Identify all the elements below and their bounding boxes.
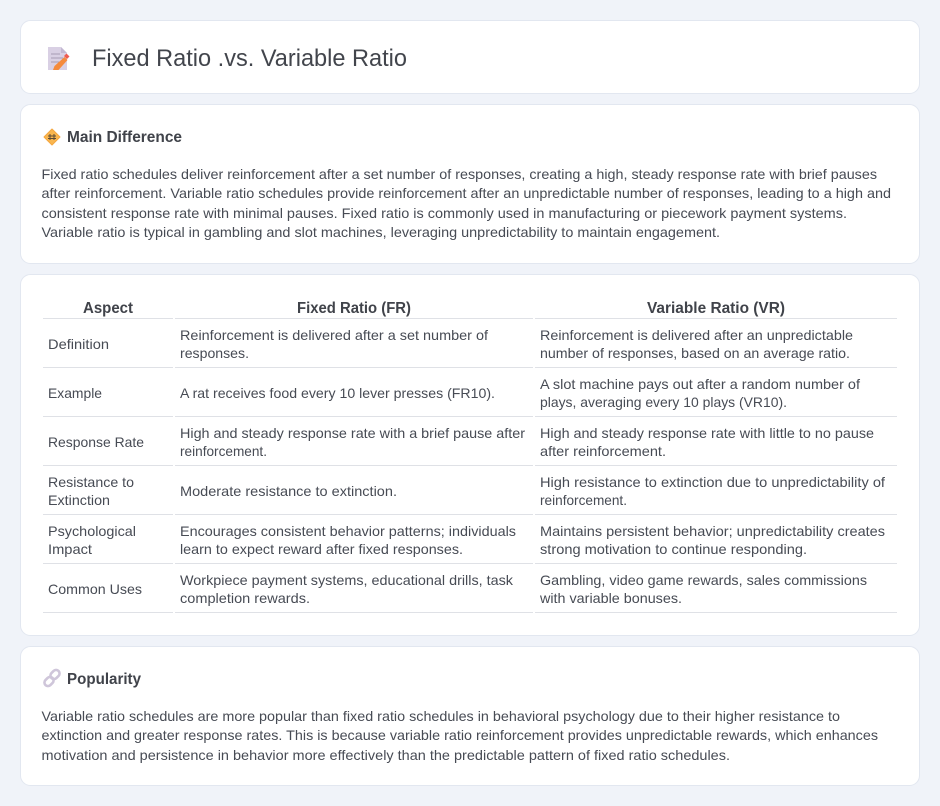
text block: main difference: Fixed ratio schedules deliver reinforcement after a set number of responses, creating a high, steady response rate with brief pauses: [42, 166, 877, 182]
text block: main difference: consistent response rate with minimal pauses. Fixed ratio is commonly used in manufacturing or piecework payment systems.: [42, 205, 847, 221]
table row: definition: Reinforcement is delivered after an unpredictable: [540, 327, 853, 343]
panel: comparison table: [20, 274, 920, 636]
table row: common uses: Gambling, video game rewards, sales commissions: [540, 572, 867, 588]
table row: psychological impact: Encourages consistent behavior patterns; individuals: [180, 523, 516, 539]
table row: response rate: High and steady response rate with a brief pause after: [180, 425, 525, 441]
text block: main difference: [42, 166, 891, 240]
table row: definition: [48, 327, 853, 361]
text block: popularity: extinction and greater response rates. This is because variable ratio reinforcement provides unpredictable rewards, which enhances: [42, 727, 878, 743]
icon: document with pencil: [48, 47, 70, 70]
table row: definition: responses.: [180, 345, 249, 361]
table row: example: A rat receives food every 10 lever presses (FR10).: [180, 385, 495, 401]
table row: definition: Reinforcement is delivered after a set number of: [180, 327, 488, 343]
table row: common uses: completion rewards.: [180, 590, 310, 606]
table row: response rate: after reinforcement.: [540, 443, 666, 459]
table row: resistance to extinction: Extinction: [48, 492, 110, 508]
table row: resistance to extinction: Moderate resistance to extinction.: [180, 483, 397, 499]
table row: common uses: Workpiece payment systems, educational drills, task: [180, 572, 514, 588]
table row: example: A slot machine pays out after a random number of: [540, 376, 860, 392]
table row: definition: number of responses, based on an average ratio.: [540, 345, 850, 361]
table row: definition: Definition: [48, 336, 109, 352]
table row: psychological impact: learn to expect reward after fixed responses.: [180, 541, 463, 557]
table row: psychological impact: [48, 523, 885, 557]
heading: popularity: Popularity: [67, 671, 141, 688]
table row: resistance to extinction: [48, 474, 885, 508]
table row: resistance to extinction: Resistance to: [48, 474, 134, 490]
table header row: Fixed Ratio (FR): [297, 300, 411, 317]
table row: common uses: Common Uses: [48, 581, 142, 597]
table row: psychological impact: Maintains persistent behavior; unpredictability creates: [540, 523, 885, 539]
text block: popularity: Variable ratio schedules are more popular than fixed ratio schedules in behavioral psychology due to their higher resistance to: [42, 708, 840, 724]
table header row: Variable Ratio (VR): [647, 300, 785, 317]
icon: diamond sign: [44, 129, 60, 145]
text block: popularity: [42, 708, 878, 763]
table row: example: Example: [48, 385, 102, 401]
panel: title header: [20, 20, 920, 94]
table row: psychological impact: strong motivation to continue responding.: [540, 541, 807, 557]
table row: common uses: [48, 572, 867, 606]
table row: response rate: reinforcement.: [180, 443, 267, 459]
table row: response rate: Response Rate: [48, 434, 144, 450]
text block: popularity: motivation and persistence in behavior more effectively than the predictable pattern of fixed ratio schedules.: [42, 747, 730, 763]
table row: common uses: with variable bonuses.: [539, 590, 682, 606]
table row: example: [48, 376, 860, 410]
text block: main difference: Variable ratio is typical in gambling and slot machines, leveraging unpredictability to maintain engagement.: [42, 224, 720, 240]
table row: response rate: High and steady response rate with little to no pause: [540, 425, 874, 441]
table row: psychological impact: Psychological: [48, 523, 136, 539]
panel: popularity: [20, 646, 920, 786]
table header row: [83, 300, 785, 317]
table row: resistance to extinction: reinforcement.: [540, 492, 627, 508]
heading: main difference: Main Difference: [67, 129, 182, 146]
table header row: Aspect: [83, 300, 134, 317]
panel: main difference: [20, 104, 920, 264]
table row: example: plays, averaging every 10 plays (VR10).: [540, 394, 787, 410]
table row: psychological impact: Impact: [48, 541, 92, 557]
text block: main difference: after reinforcement. Variable ratio schedules provide reinforcement after an unpredictable number of responses, leading to a high and: [42, 185, 891, 201]
table row: response rate: [48, 425, 874, 459]
table row: resistance to extinction: High resistance to extinction due to unpredictability of: [540, 474, 885, 490]
title: Fixed Ratio .vs. Variable Ratio: [92, 45, 407, 72]
icon: link: [43, 668, 61, 688]
